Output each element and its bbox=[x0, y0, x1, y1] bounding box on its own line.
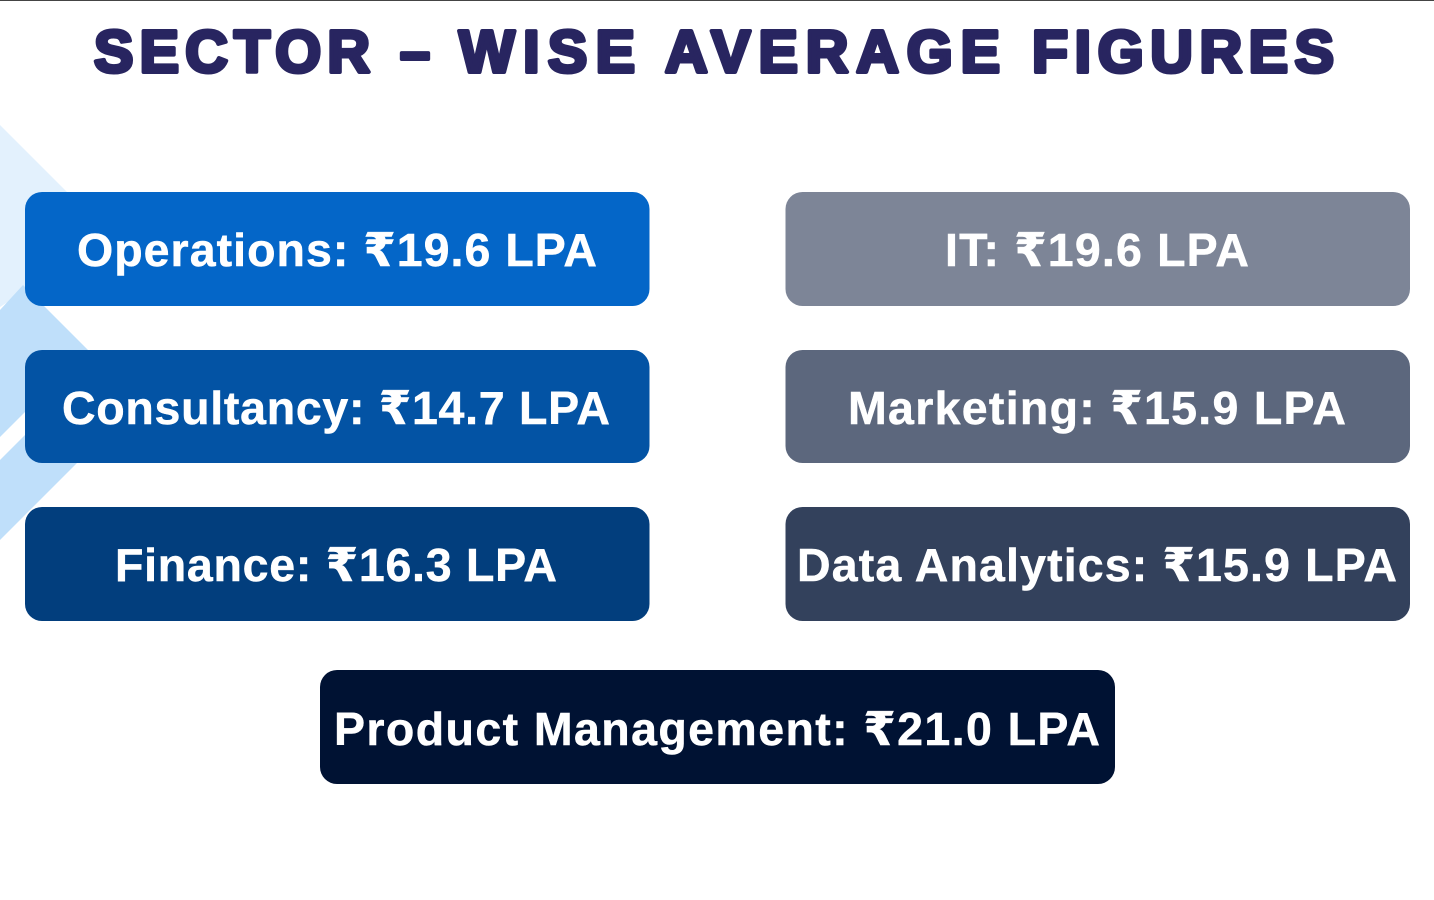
title: AVERAGE bbox=[665, 19, 1000, 85]
title: FIGURES bbox=[1032, 19, 1334, 85]
card: Product Management bbox=[320, 670, 1115, 784]
card: Data Analytics bbox=[786, 507, 1410, 621]
card: Marketing: Marketing: ₹15.9 LPA bbox=[848, 382, 1346, 434]
card: Consultancy bbox=[25, 350, 650, 463]
card: Finance: Finance: ₹16.3 LPA bbox=[115, 539, 557, 591]
card: Data Analytics: Data Analytics: ₹15.9 LPA bbox=[797, 539, 1397, 591]
card: Product Management: Product Management: ₹21.0 LPA bbox=[334, 703, 1100, 755]
decorative background diamonds bbox=[0, 125, 140, 540]
card: Operations bbox=[25, 192, 650, 306]
card: Finance bbox=[25, 507, 650, 621]
title: WISE bbox=[459, 19, 635, 85]
card: Operations: Operations: ₹19.6 LPA bbox=[77, 224, 597, 276]
card: IT: IT: ₹19.6 LPA bbox=[945, 224, 1249, 276]
title bbox=[94, 19, 1334, 85]
title: – bbox=[400, 19, 430, 85]
card: IT bbox=[786, 192, 1410, 306]
title: SECTOR bbox=[94, 19, 370, 85]
card: Consultancy: Consultancy: ₹14.7 LPA bbox=[62, 382, 610, 434]
card: Marketing bbox=[786, 350, 1410, 463]
